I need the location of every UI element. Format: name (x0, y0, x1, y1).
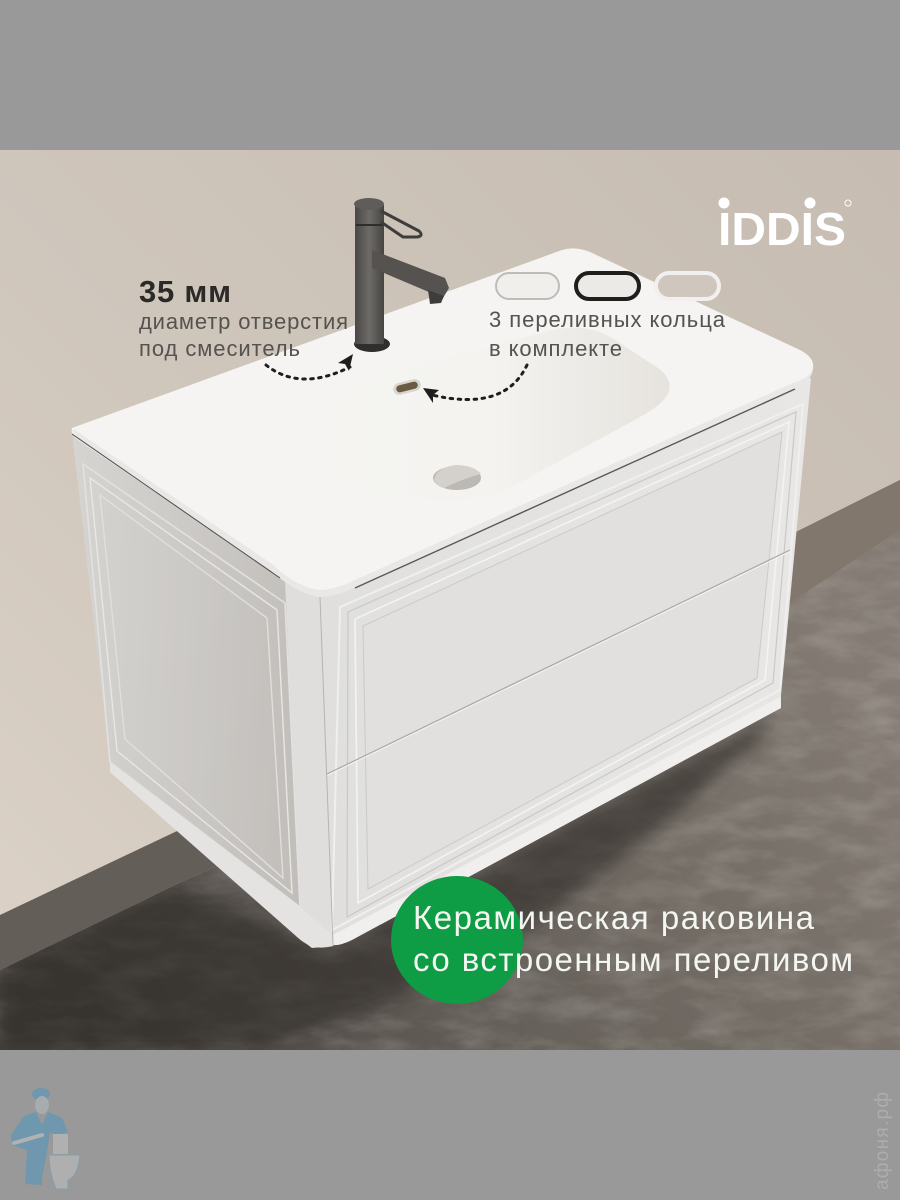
rings label and icons (489, 273, 726, 361)
watermark mascot: plumber with toilet (11, 1088, 80, 1189)
ring: white (656, 273, 719, 299)
rings label and icons: 3 переливных кольца (489, 307, 726, 332)
ring: chrome (496, 273, 559, 299)
rings label and icons: в комплекте (489, 336, 622, 361)
cabinet side panel (72, 432, 333, 948)
bottom grey band (0, 1050, 900, 1200)
watermark text: афоня.рф (872, 1092, 893, 1190)
main caption: со встроенным переливом (413, 941, 853, 978)
green circle accent (391, 876, 523, 1004)
heading: 35 мм callout: диаметр отверстия (139, 309, 348, 334)
heading: 35 мм callout: 35 мм (139, 274, 231, 309)
overflow hole (392, 378, 422, 396)
drain (433, 465, 481, 490)
ring: black (576, 273, 639, 299)
basin bowl (272, 328, 670, 502)
ceramic sink top slab (72, 248, 813, 597)
heading: 35 мм callout: под смеситель (139, 336, 300, 361)
top grey band (0, 0, 900, 150)
floor and baseboard (0, 480, 900, 1050)
wall background (0, 150, 900, 1050)
cabinet front with two drawers (320, 378, 811, 945)
logo: IDDIS: IDDIS (718, 203, 846, 255)
vanity cabinet (72, 248, 813, 948)
faucet (354, 198, 449, 352)
arrow: to overflow ring (423, 365, 527, 403)
heading: 35 мм callout (139, 274, 348, 361)
main caption: Керамическая раковина (413, 899, 815, 936)
main caption (413, 899, 853, 978)
arrow: to faucet hole (266, 354, 353, 379)
